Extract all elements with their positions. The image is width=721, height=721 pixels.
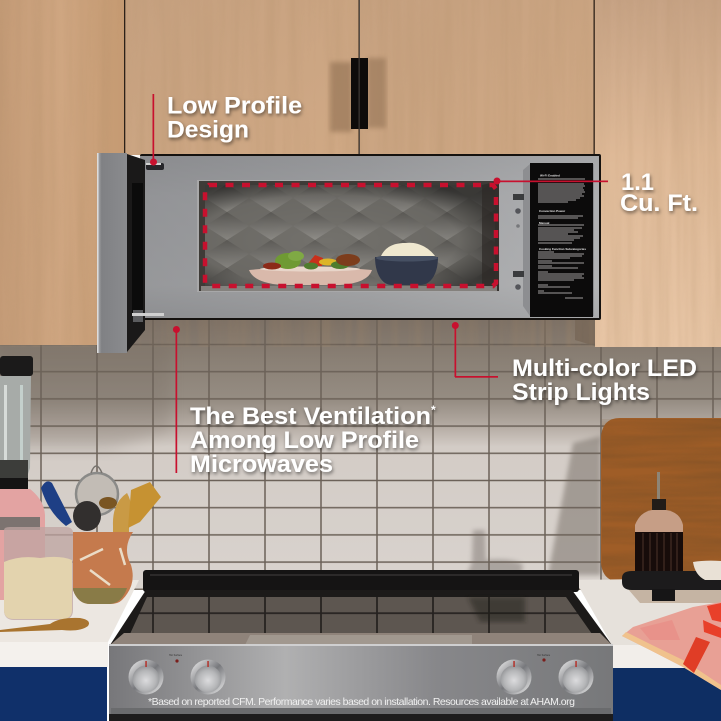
- label: capacity: [620, 169, 698, 217]
- range back rail: [143, 570, 579, 592]
- left base cabinet: [0, 667, 107, 721]
- utensil crock: [41, 466, 161, 604]
- hot surface indicator right: Hot Surface: [537, 654, 551, 657]
- left countertop: [0, 580, 139, 667]
- control panel text: Convection Power: [539, 209, 566, 213]
- cooktop glass: [110, 590, 612, 645]
- wood spoon: [113, 493, 132, 532]
- callout leader: capacity: [494, 178, 608, 184]
- label: low profile design: [167, 92, 302, 144]
- oven window: [197, 180, 500, 292]
- label: ventilation: Microwaves: [190, 451, 333, 478]
- wood spatulas: [128, 482, 161, 528]
- right base cabinet: [613, 668, 721, 721]
- control panel: [513, 163, 594, 317]
- wooden spoon on counter: [0, 618, 89, 632]
- label: capacity: Cu. Ft.: [620, 190, 698, 217]
- blue spatula: [41, 481, 72, 526]
- callout leader: LED lights: [452, 322, 498, 378]
- wood cabinets: [0, 0, 721, 347]
- callout leader: ventilation: [173, 326, 180, 473]
- glass jar of rice: [4, 527, 73, 620]
- label: ventilation: *: [431, 403, 436, 417]
- footnote: *Based on reported CFM. Performance varies based on installation. Resources available at AHAM.org: [148, 696, 575, 708]
- control panel text: [538, 174, 586, 298]
- label: LED strip lights: Multi-color LED: [512, 355, 697, 382]
- microwave body: [140, 154, 601, 320]
- cabinet: left: [0, 0, 125, 345]
- food: plate: [249, 251, 372, 285]
- knob 2: [190, 660, 226, 694]
- black tray and dish: [622, 561, 721, 601]
- slotted spoon: [73, 501, 101, 531]
- cabinet: center left door: [125, 0, 359, 155]
- label: capacity: 1.1: [621, 169, 654, 196]
- right countertop: [575, 578, 721, 669]
- food: rice bowl: [375, 243, 438, 285]
- knob 4: [558, 660, 594, 694]
- terracotta crock: [73, 532, 133, 604]
- hot surface indicator left: [169, 654, 183, 663]
- label: ventilation: Among Low Profile: [190, 427, 419, 454]
- cabinet handle: [330, 58, 386, 132]
- callout leader: low profile design: [150, 94, 157, 166]
- cabinet: center right door: [360, 0, 595, 155]
- dish towel: [622, 602, 721, 690]
- panel buttons: [513, 194, 524, 290]
- hot surface indicator right: [537, 654, 551, 662]
- blender: [0, 356, 45, 600]
- control panel text: Cooking Function Subcategories: [539, 247, 586, 251]
- knob 1: [128, 660, 164, 694]
- dashed cavity outline: [205, 185, 496, 286]
- control panel text: Wi-Fi Enabled: [540, 174, 560, 178]
- open door: [97, 153, 164, 353]
- microwave: [97, 153, 601, 353]
- label: low profile design: Design: [167, 116, 249, 144]
- range: [109, 570, 613, 721]
- control panel text: Manual: [539, 221, 550, 225]
- label: low profile design: Low Profile: [167, 92, 302, 120]
- background tile wall: [0, 320, 721, 590]
- oil bottle: [635, 472, 683, 580]
- strainer: [76, 466, 118, 515]
- cabinet: right: [595, 0, 721, 347]
- front control panel: [109, 644, 613, 721]
- hot surface indicator left: Hot Surface: [169, 654, 183, 657]
- label: ventilation: [190, 403, 436, 478]
- label: LED strip lights: Strip Lights: [512, 379, 650, 406]
- knob 3: [496, 660, 532, 694]
- label: LED strip lights: [512, 355, 697, 406]
- label: ventilation: The Best Ventilation: [190, 403, 431, 430]
- cutting board: [601, 418, 721, 582]
